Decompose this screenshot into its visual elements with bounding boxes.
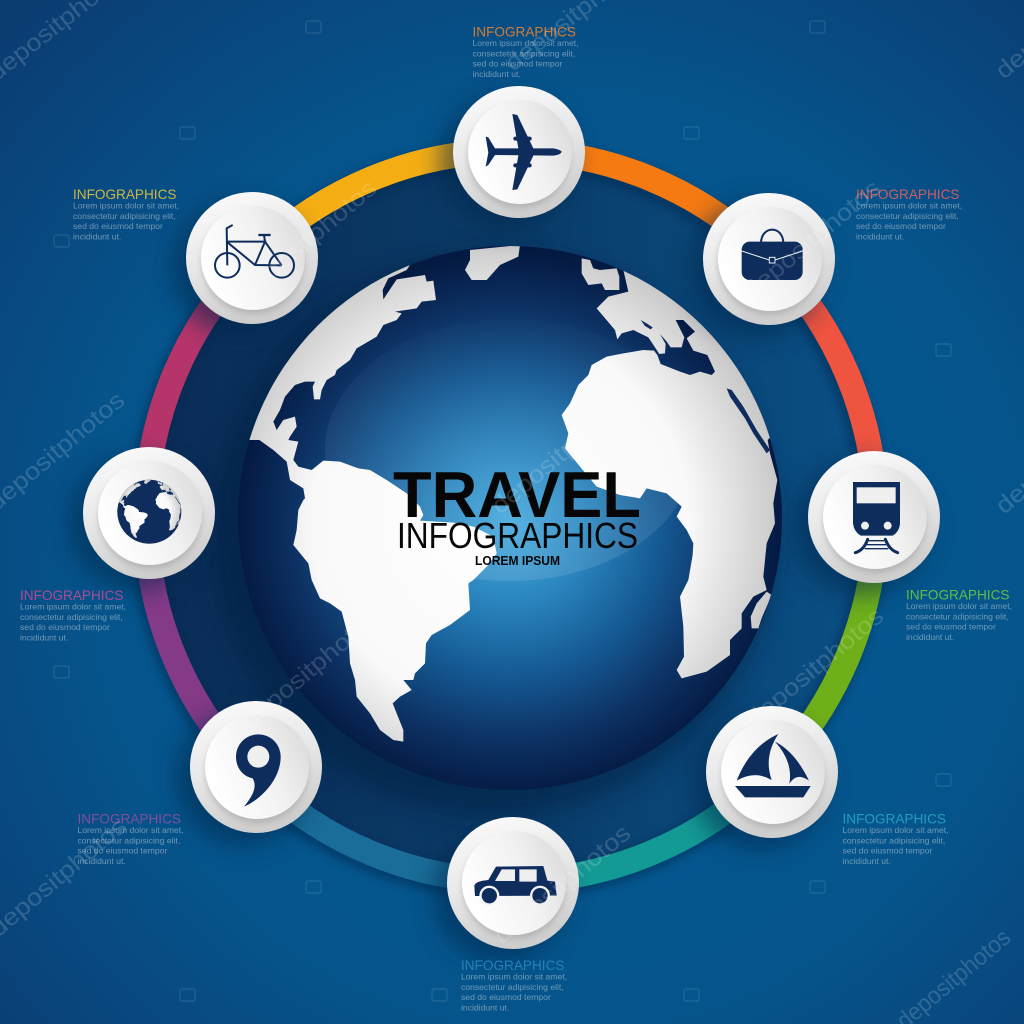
segment: purple <box>146 516 253 774</box>
label: globe <box>20 588 126 642</box>
label: bicycle: sed do eiusmod tempor <box>73 221 163 231</box>
label: train <box>906 588 1012 642</box>
segment: magenta <box>146 258 253 516</box>
icon: globe <box>117 480 183 544</box>
label: train: incididunt ut. <box>906 632 954 642</box>
watermark: depositphotos <box>487 390 634 520</box>
label: briefcase: consectetur adipisicing elit, <box>856 211 959 221</box>
globe <box>238 245 800 790</box>
label: location pin: sed do eiusmod tempor <box>78 846 167 856</box>
label: car: INFOGRAPHICS <box>461 958 564 973</box>
globe highlight <box>325 319 695 581</box>
segment: green <box>769 516 876 774</box>
label: car: consectetur adipisicing elit, <box>461 982 564 992</box>
label: top: sed do eiusmod tempor <box>472 58 562 68</box>
label: top: incididunt ut. <box>472 69 521 79</box>
label: bicycle: incididunt ut. <box>73 231 121 241</box>
heading: infographics: INFOGRAPHICS <box>397 515 638 556</box>
label: car: sed do eiusmod tempor <box>461 992 551 1002</box>
label: car: Lorem ipsum dolor sit amet, <box>461 972 567 982</box>
watermark: depositphotos <box>739 175 886 305</box>
segment: teal <box>511 774 769 881</box>
label: boat: sed do eiusmod tempor <box>842 846 932 856</box>
label: briefcase: INFOGRAPHICS <box>856 187 959 202</box>
label: boat: INFOGRAPHICS <box>842 812 946 826</box>
label: bicycle: Lorem ipsum dolor sit amet, <box>73 200 179 210</box>
button: briefcase <box>689 193 835 337</box>
icon: bicycle <box>215 225 294 278</box>
inner disc of ring <box>158 163 864 869</box>
watermark: depositphotos <box>742 603 889 733</box>
label: globe: Lorem ipsum dolor sit amet, <box>20 602 126 612</box>
label: car <box>461 958 567 1012</box>
label: location pin: consectetur adipisicing elit, <box>78 835 180 845</box>
subheading: LOREM IPSUM <box>475 553 560 568</box>
button: globe <box>69 447 215 591</box>
world map <box>247 245 800 742</box>
label: briefcase: incididunt ut. <box>856 231 904 241</box>
label: train: Lorem ipsum dolor sit amet, <box>906 601 1012 611</box>
button: boat <box>692 706 838 850</box>
label: globe: INFOGRAPHICS <box>20 588 123 603</box>
label: briefcase <box>856 187 962 241</box>
label: top: Lorem ipsum dolor sit amet, <box>472 38 579 48</box>
label: boat: incididunt ut. <box>842 856 891 866</box>
label: top <box>472 24 579 79</box>
button: car <box>433 817 579 962</box>
label: location pin <box>78 812 184 866</box>
segment: red <box>769 258 876 516</box>
label: top: INFOGRAPHICS <box>472 24 576 40</box>
button: bicycle <box>172 192 318 336</box>
button: plane <box>439 86 585 230</box>
label: top: consectetur adipisicing elit, <box>472 48 575 58</box>
label: globe: sed do eiusmod tempor <box>20 622 110 632</box>
watermark: depositphotos <box>237 605 384 735</box>
ring: coloured segments <box>143 151 876 885</box>
watermark: depositphotos <box>235 175 382 305</box>
label: location pin: Lorem ipsum dolor sit amet, <box>78 825 184 835</box>
icon: plane <box>486 114 562 190</box>
centre title <box>393 458 641 568</box>
label: location pin: INFOGRAPHICS <box>78 812 181 826</box>
icon: briefcase <box>742 230 803 280</box>
label: boat: Lorem ipsum dolor sit amet, <box>842 825 949 835</box>
label: train: INFOGRAPHICS <box>906 588 1009 602</box>
heading: travel: TRAVEL <box>393 458 641 531</box>
label: bicycle <box>73 187 179 241</box>
button: location pin <box>176 701 322 845</box>
icon: location pin <box>236 734 281 807</box>
watermark: depositphotos <box>489 820 636 950</box>
segment: blue <box>253 774 511 881</box>
label: train: consectetur adipisicing elit, <box>906 611 1009 621</box>
label: globe: incididunt ut. <box>20 632 68 642</box>
label: globe: consectetur adipisicing elit, <box>20 612 123 622</box>
icon: car <box>474 866 557 906</box>
label: boat <box>842 812 949 866</box>
label: briefcase: Lorem ipsum dolor sit amet, <box>856 200 962 210</box>
label: briefcase: sed do eiusmod tempor <box>856 221 946 231</box>
label: location pin: incididunt ut. <box>78 856 126 866</box>
segment: yellow <box>253 151 511 258</box>
segment: orange <box>511 151 769 258</box>
label: train: sed do eiusmod tempor <box>906 622 996 632</box>
label: car: incididunt ut. <box>461 1002 509 1012</box>
label: bicycle: INFOGRAPHICS <box>73 187 176 202</box>
icon: train <box>853 482 900 553</box>
icon: boat <box>735 734 811 797</box>
label: bicycle: consectetur adipisicing elit, <box>73 211 176 221</box>
button: train <box>794 451 940 595</box>
label: boat: consectetur adipisicing elit, <box>842 835 945 845</box>
